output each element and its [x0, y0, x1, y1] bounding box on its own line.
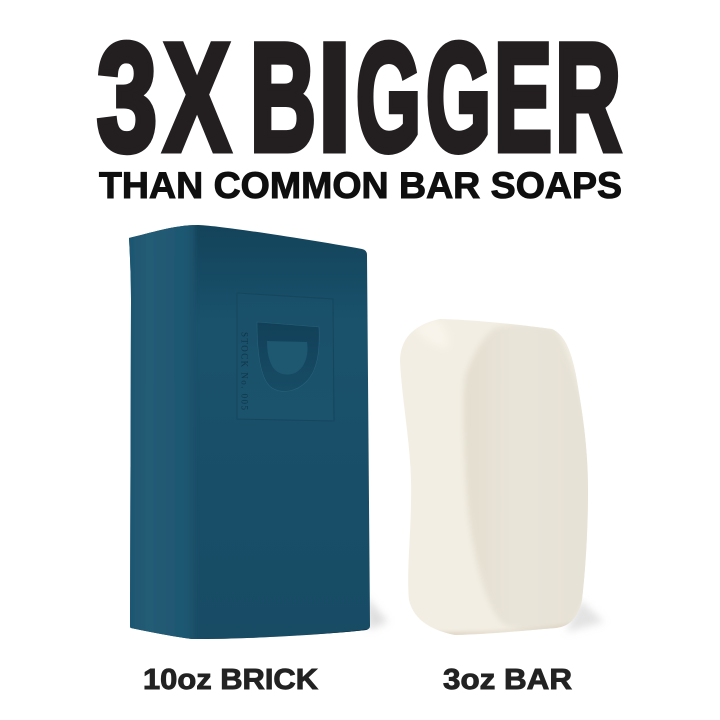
title: 3X BIGGER: X [164, 12, 230, 183]
embossed panel [237, 293, 334, 421]
brick soap [129, 225, 370, 639]
title: 3X BIGGER: E [494, 12, 552, 183]
infographic canvas [96, 40, 623, 690]
subtitle: than common bar soaps: THAN COMMON BAR SOAPS [99, 165, 622, 206]
title: 3X BIGGER: B [250, 12, 316, 183]
shadow: bar [566, 600, 604, 632]
title: 3X BIGGER: G [426, 12, 491, 183]
white bar soap [395, 315, 595, 640]
title: 3X BIGGER: G [356, 12, 421, 183]
embossed D logo [257, 322, 319, 391]
title: 3X BIGGER: I [318, 12, 351, 183]
title: 3X BIGGER [97, 12, 621, 183]
shadow: brick [366, 596, 388, 630]
stock number text: STOCK No. 005 [240, 332, 250, 410]
label: 3oz bar: 3oz BAR [443, 664, 572, 696]
brick body [129, 225, 370, 639]
title: 3X BIGGER: R [555, 12, 621, 183]
label: 10oz brick: 10oz BRICK [143, 664, 318, 696]
title: 3X BIGGER: 3 [97, 12, 157, 183]
soap front face [464, 324, 595, 633]
